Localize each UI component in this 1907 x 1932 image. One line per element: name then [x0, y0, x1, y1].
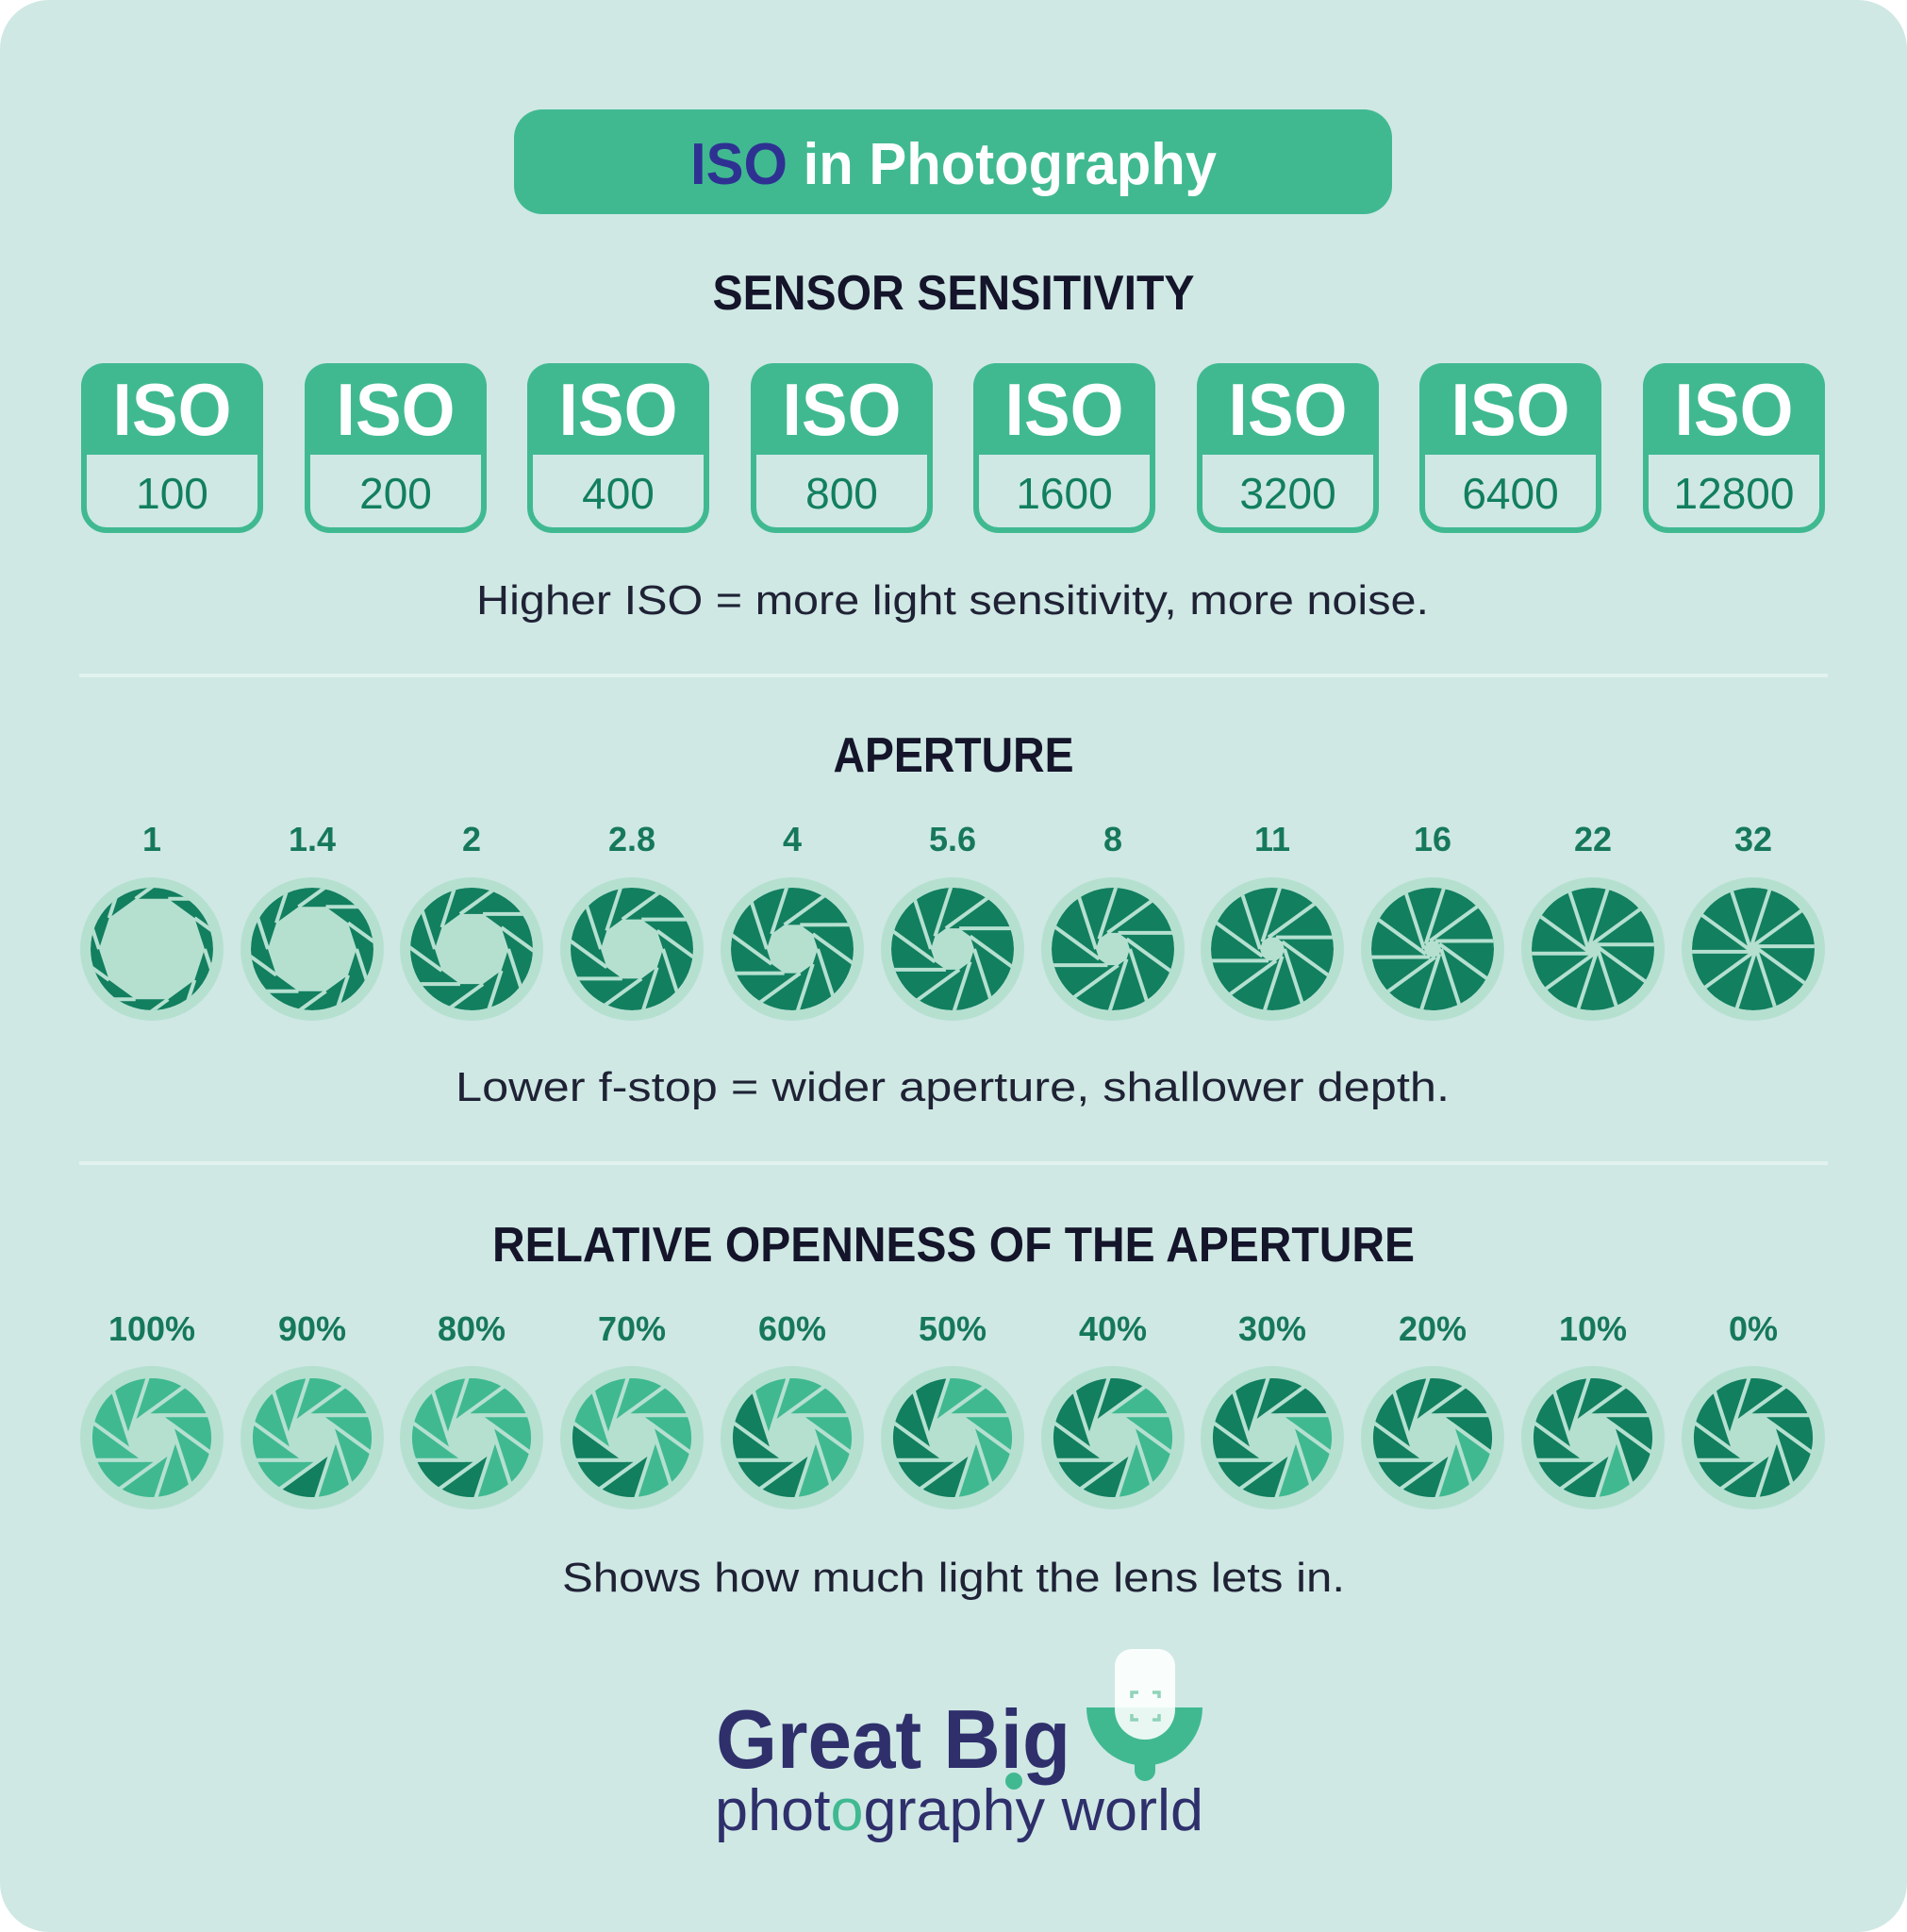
percent labels: 60% — [758, 1309, 826, 1348]
title banner — [514, 109, 1392, 214]
ISO box 400 — [527, 363, 709, 530]
icon: 90% — [240, 1365, 384, 1510]
percent labels: 80% — [438, 1309, 506, 1348]
icon: f/1 — [80, 877, 224, 1021]
f-stop labels — [142, 820, 1772, 858]
icon: f/22 — [1521, 877, 1665, 1021]
percent labels: 0% — [1729, 1309, 1778, 1348]
ISO box 12800: ISO — [1675, 368, 1794, 451]
ISO box 800: ISO — [783, 368, 902, 451]
heading: sensor sensitivity: SENSOR SENSITIVITY — [713, 266, 1194, 321]
icon: f/11 — [1201, 877, 1344, 1021]
f-stop labels: 8 — [1103, 820, 1122, 858]
f-stop labels: 11 — [1254, 820, 1290, 858]
percent labels: 70% — [598, 1309, 666, 1348]
f-stop labels: 4 — [783, 820, 802, 858]
percent labels: 30% — [1238, 1309, 1306, 1348]
percent labels: 50% — [919, 1309, 987, 1348]
caption: aperture: Lower f-stop = wider aperture, shallower depth. — [456, 1064, 1450, 1110]
icon: 70% — [560, 1365, 704, 1510]
f-stop labels: 2 — [462, 820, 481, 858]
icon: 60% — [721, 1365, 864, 1510]
icon: f/1.4 — [240, 877, 384, 1021]
f-stop labels: 1.4 — [289, 820, 336, 858]
icon: f/32 — [1682, 877, 1825, 1021]
ISO box 12800 — [1643, 363, 1825, 530]
icon: 10% — [1521, 1365, 1665, 1510]
ISO box 3200: 3200 — [1239, 469, 1336, 518]
f-stop labels: 2.8 — [608, 820, 655, 858]
ISO box 800: 800 — [805, 469, 878, 518]
ISO box 3200 — [1197, 363, 1379, 530]
caption: ISO: Higher ISO = more light sensitivity, more noise. — [476, 577, 1429, 624]
icon: 50% — [881, 1365, 1024, 1510]
percent labels — [108, 1309, 1778, 1348]
ISO box 400: 400 — [582, 469, 655, 518]
percent labels: 20% — [1399, 1309, 1467, 1348]
icon: 20% — [1361, 1365, 1504, 1510]
ISO boxes row — [81, 363, 1825, 530]
icon: 0% — [1682, 1365, 1825, 1510]
f-stop labels: 32 — [1734, 820, 1772, 858]
ISO box 6400: 6400 — [1462, 469, 1559, 518]
ISO box 3200: ISO — [1228, 368, 1347, 451]
logo icon: mic — [1086, 1649, 1202, 1781]
ISO box 1600: ISO — [1005, 368, 1124, 451]
icon: 40% — [1041, 1365, 1185, 1510]
aperture icons row — [80, 877, 1825, 1021]
icon: f/2 — [400, 877, 543, 1021]
ISO box 100: ISO — [113, 368, 232, 451]
logo text: Great Big — [716, 1692, 1070, 1786]
percent labels: 10% — [1559, 1309, 1627, 1348]
ISO box 100 — [81, 363, 263, 530]
caption: openness: Shows how much light the lens lets in. — [562, 1555, 1345, 1601]
title banner: ISO in Photography — [690, 132, 1217, 197]
f-stop labels: 22 — [1574, 820, 1612, 858]
ISO box 200 — [305, 363, 487, 530]
icon: 100% — [80, 1365, 224, 1510]
icon: f/2.8 — [560, 877, 704, 1021]
icon: f/16 — [1361, 877, 1504, 1021]
logo: photography world — [715, 1778, 1203, 1843]
percent labels: 40% — [1079, 1309, 1147, 1348]
ISO box 200: ISO — [336, 368, 455, 451]
f-stop labels: 16 — [1414, 820, 1451, 858]
ISO box 6400: ISO — [1451, 368, 1569, 451]
icon: 80% — [400, 1365, 543, 1510]
percent labels: 100% — [108, 1309, 195, 1348]
icon: f/5.6 — [881, 877, 1024, 1021]
ISO box 1600 — [973, 363, 1155, 530]
ISO box 1600: 1600 — [1016, 469, 1113, 518]
ISO box 100: 100 — [136, 469, 208, 518]
ISO box 6400 — [1419, 363, 1601, 530]
relative openness icons row — [80, 1365, 1825, 1510]
heading: aperture: APERTURE — [834, 728, 1073, 783]
ISO box 400: ISO — [558, 368, 677, 451]
icon: f/8 — [1041, 877, 1185, 1021]
icon: 30% — [1201, 1365, 1344, 1510]
f-stop labels: 5.6 — [929, 820, 976, 858]
f-stop labels: 1 — [142, 820, 161, 858]
icon: f/4 — [721, 877, 864, 1021]
logo — [715, 1649, 1203, 1843]
heading: relative openness: RELATIVE OPENNESS OF THE APERTURE — [492, 1218, 1415, 1273]
percent labels: 90% — [278, 1309, 346, 1348]
ISO box 12800: 12800 — [1674, 469, 1794, 518]
ISO box 200: 200 — [359, 469, 432, 518]
ISO box 800 — [751, 363, 933, 530]
